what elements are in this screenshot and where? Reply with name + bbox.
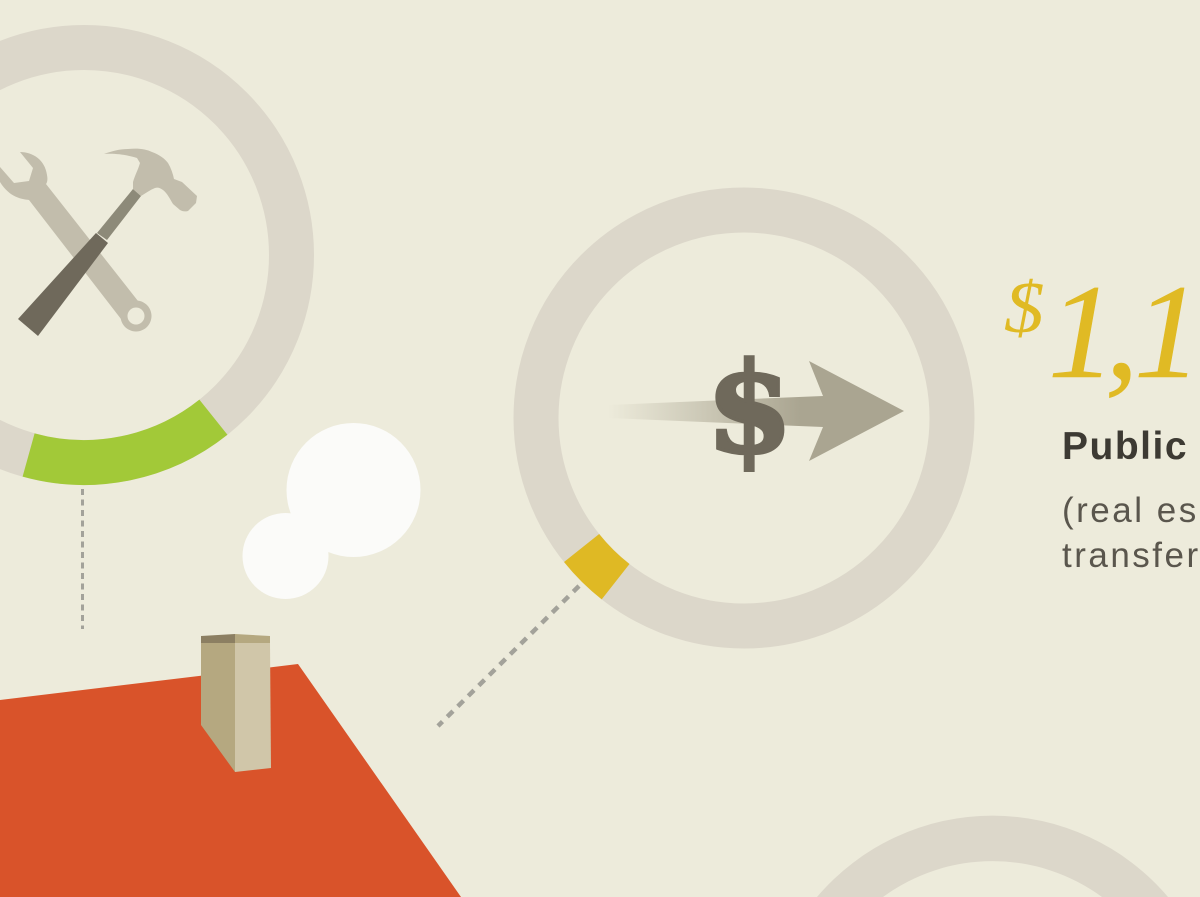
panel: lower ring [817, 816, 1168, 897]
panel: tools ring [0, 48, 292, 463]
ring track: public revenue [536, 210, 952, 626]
icon: dollar with arrow [608, 336, 904, 482]
house: smoke [242, 423, 420, 599]
icon: hammer [18, 149, 197, 336]
currency symbol: $ [1004, 267, 1044, 348]
description line 1: (real es [1062, 491, 1199, 530]
icon: dollar sign: $ [706, 336, 793, 482]
gold ring segment [582, 548, 616, 582]
dotted leader: public revenue [438, 586, 579, 726]
panel: public revenue ring [536, 210, 952, 626]
house: chimney [201, 634, 271, 772]
ring track: tools [0, 48, 292, 462]
label: public heading: Public [1062, 425, 1188, 468]
dotted leader: tools [81, 489, 84, 629]
label: description [1062, 491, 1200, 575]
icon: arrow [608, 361, 904, 461]
house: roof [0, 664, 461, 897]
green ring segment [29, 417, 213, 463]
icon: wrench [0, 152, 152, 332]
icon: wrench and hammer [0, 149, 197, 336]
amount digits: 1,1 [1048, 258, 1200, 407]
description line 2: transfer [1062, 536, 1200, 575]
figure: amount [1004, 258, 1200, 407]
